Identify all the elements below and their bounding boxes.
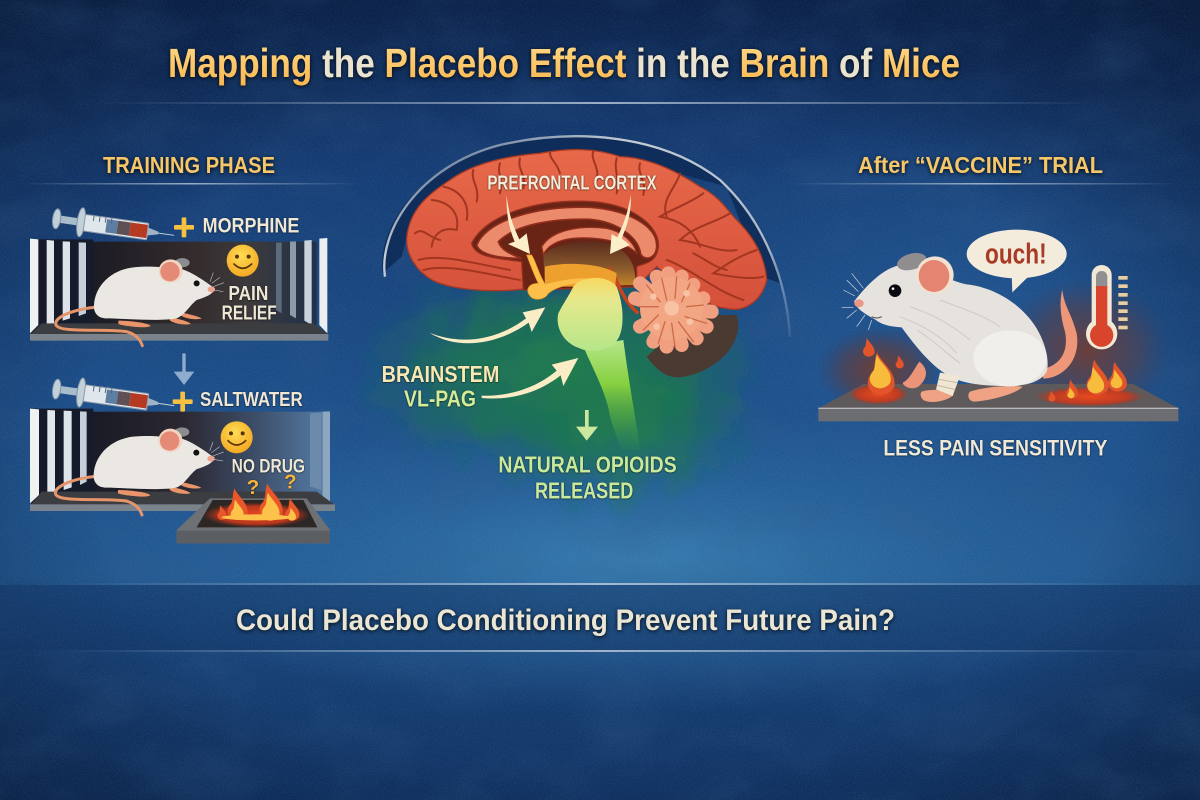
limbic cavity xyxy=(472,201,658,290)
panel: brain diagram xyxy=(353,136,790,510)
brainstem xyxy=(558,278,623,351)
face xyxy=(842,273,901,330)
smoky glow xyxy=(817,277,1173,423)
corpus callosum xyxy=(477,207,657,258)
mouse: saltwater xyxy=(55,427,224,515)
tail xyxy=(1042,289,1077,379)
label: brainstem vl-pag: VL-PAG xyxy=(404,385,476,411)
speech bubble: ouch! xyxy=(985,238,1047,270)
label: pain relief xyxy=(222,283,277,324)
red pathway xyxy=(608,268,638,313)
icon: smiley xyxy=(221,421,253,453)
embers xyxy=(848,383,1145,407)
platform xyxy=(818,384,1178,421)
cerebellum xyxy=(635,273,712,347)
heading: training phase: TRAINING PHASE xyxy=(103,152,275,178)
panel: after vaccine trial xyxy=(817,230,1178,460)
question marks xyxy=(247,470,297,499)
arrow: down xyxy=(174,353,194,385)
arrow: lower one xyxy=(429,307,545,343)
label: natural opioids released xyxy=(498,451,677,504)
thermometer xyxy=(1086,265,1128,349)
thalamus xyxy=(543,242,635,287)
flames xyxy=(863,338,1127,402)
arrow: left prefrontal xyxy=(507,195,530,254)
mouse: morphine xyxy=(56,258,224,346)
question marks: ? xyxy=(284,470,297,493)
dark dome xyxy=(382,136,781,283)
spinal cord xyxy=(583,340,640,450)
label: brainstem vl-pag: BRAINSTEM xyxy=(382,361,499,387)
panel: training phase xyxy=(30,204,335,543)
label: natural opioids released: NATURAL OPIOIDS xyxy=(498,451,677,477)
other front leg xyxy=(903,362,926,388)
arrow: lower two xyxy=(482,358,578,398)
plus sign xyxy=(174,217,194,237)
title: Mapping the Placebo Effect in the Brain of Mice xyxy=(168,40,960,86)
back foot xyxy=(968,386,1023,402)
cerebrum xyxy=(407,150,767,309)
arrow: down xyxy=(576,410,598,441)
syringe: saltwater xyxy=(51,374,176,420)
ears xyxy=(895,250,954,294)
green glow xyxy=(353,260,767,510)
bottom question: Could Placebo Conditioning Prevent Future Pain? xyxy=(236,604,895,637)
orange pathway xyxy=(545,264,617,287)
label: no drug: NO DRUG xyxy=(232,457,305,478)
speech bubble xyxy=(967,230,1067,292)
label: prefrontal cortex: PREFRONTAL CORTEX xyxy=(487,173,657,195)
label: pain relief: RELIEF xyxy=(222,302,277,324)
mouse body xyxy=(854,264,1048,386)
yellow hook xyxy=(527,255,590,299)
plus sign xyxy=(173,392,193,412)
heading: after vaccine trial: After “VACCINE” TRIAL xyxy=(858,152,1103,178)
label: less pain sensitivity: LESS PAIN SENSITIVITY xyxy=(883,435,1108,460)
question marks: ? xyxy=(247,476,259,499)
label: brainstem vl-pag xyxy=(382,361,499,411)
label: saltwater: SALTWATER xyxy=(200,389,303,411)
cage: morphine xyxy=(30,238,328,341)
fire tray xyxy=(177,483,330,543)
label: pain relief: PAIN xyxy=(228,283,268,305)
cerebellum back xyxy=(647,315,738,377)
label: morphine: MORPHINE xyxy=(203,215,299,238)
arrow: right prefrontal xyxy=(610,195,631,254)
syringe: morphine xyxy=(51,204,176,250)
bandaged leg xyxy=(921,373,960,402)
cage: saltwater xyxy=(30,409,335,511)
icon: smiley xyxy=(227,245,259,277)
label: natural opioids released: RELEASED xyxy=(535,478,633,504)
